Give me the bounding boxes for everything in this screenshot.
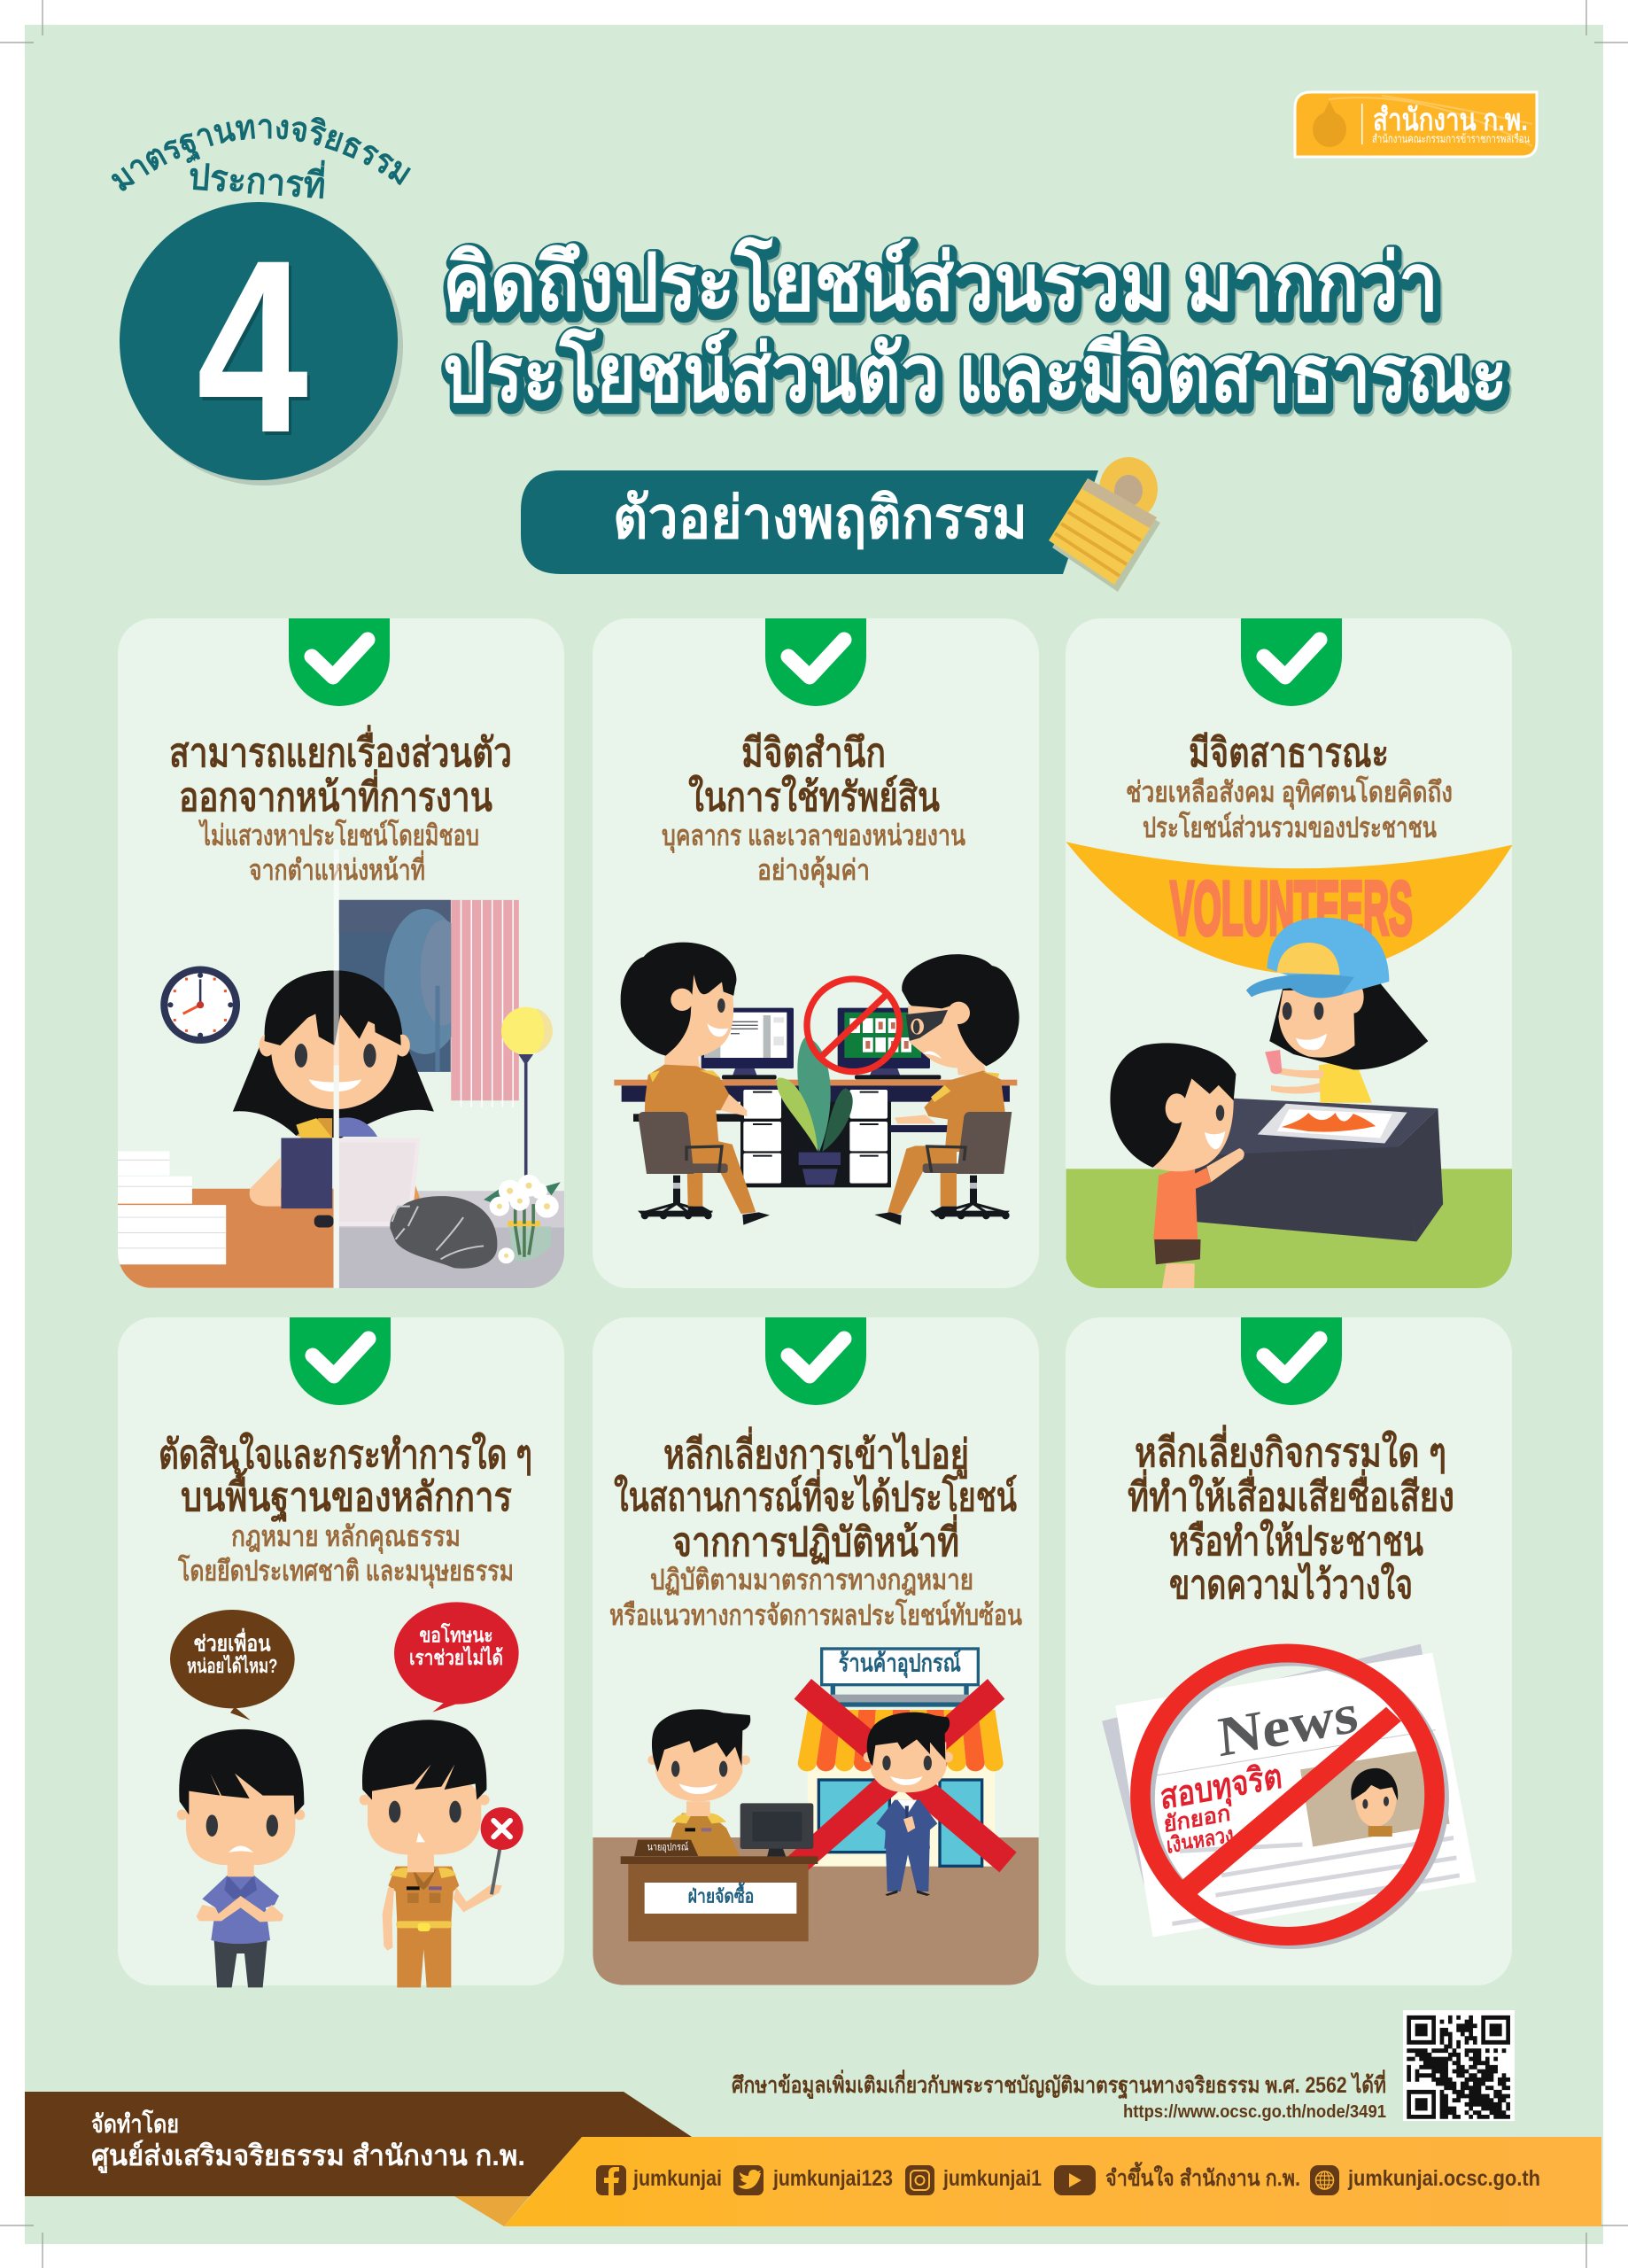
computer monitor [740,1803,813,1857]
QR code [1403,2010,1515,2121]
text block: card 3: ประโยชน์ส่วนรวมของประชาชน [1143,811,1437,843]
panel: card 3 public mind volunteers [1066,618,1514,1290]
text block: card 1: สามารถแยกเรื่องส่วนตัว [169,725,512,775]
banner: behaviour examples: ตัวอย่างพฤติกรรม [613,485,1027,550]
illustration: two officers at desks [614,943,1019,1225]
text block: card 4 [159,1431,532,1589]
icon: twitter [733,2165,764,2195]
footer: orange social media bar [504,2137,1601,2226]
icon: check shield 3 [1241,618,1342,706]
illustration: newspaper with prohibition sign: News [1215,1682,1361,1769]
text block: card 2: บุคลากร และเวลาของหน่วยงาน [662,819,965,854]
icon: youtube [1054,2165,1096,2195]
text block: card 1 [169,725,512,886]
icon: instagram [905,2165,934,2195]
shop building and sign [798,1649,1004,1867]
text block: card 4: โดยยึดประเทศชาติ และมนุษยธรรม [177,1554,514,1589]
illustration: newspaper with prohibition sign: สอบทุจริต [1159,1757,1283,1819]
social links: jumkunjai1 [942,2166,1042,2191]
character: man in blue shirt [177,1729,305,1987]
text block: card 3: มีจิตสาธารณะ [1189,730,1389,775]
text block: more information note: https://www.ocsc.go.th/node/3491 [1123,2102,1386,2122]
illustration: volunteer serving food: VOLUNTEERS [1170,867,1413,951]
character: officer with stop sign [360,1720,523,1987]
icon: check shield 2 [765,618,866,706]
text block: card 6: ที่ทำให้เสื่อมเสียชื่อเสียง [1128,1469,1454,1519]
text block: card 5: ในสถานการณ์ที่จะได้ประโยชน์ [614,1469,1017,1519]
text block: more information note: ศึกษาข้อมูลเพิ่มเติมเกี่ยวกับพระราชบัญญัติมาตรฐานทางจริยธรรม พ.ศ. 2562 ได้ที่ [732,2070,1386,2100]
text block: card 5: หรือแนวทางการจัดการผลประโยชน์ทับซ้อน [609,1598,1022,1631]
panel: card 1 separate personal matters [118,618,565,1290]
text block: card 1: ไม่แสวงหาประโยชน์โดยมิชอบ [198,819,479,851]
main title: คิดถึงประโยชน์ส่วนรวม มากกว่า [443,237,1438,328]
number badge 4 [120,202,403,487]
illustration: volunteer serving food [1066,842,1514,1290]
logo: OCSC office badge: สำนักงานคณะกรรมการข้าราชการพลเรือน [1372,132,1530,145]
illustration: asking favour and officer refusing [170,1602,523,1987]
text block: card 2 [662,730,965,889]
callout: brown speech bubble [170,1610,295,1720]
text block: card 6: ขาดความไว้วางใจ [1169,1561,1413,1607]
number badge 4: 4 [197,208,309,484]
text block: more information note [732,2070,1386,2122]
callout: red speech bubble: เราช่วยไม่ได้ [409,1645,503,1669]
text block: card 3 [1126,730,1453,843]
illustration: newspaper with prohibition sign: ยักยอก [1163,1801,1231,1837]
logo: OCSC office badge: สำนักงาน ก.พ. [1373,103,1528,137]
text block: card 2: มีจิตสำนึก [741,730,886,775]
icon: facebook [596,2165,626,2195]
text block: card 4: ตัดสินใจและกระทำการใด ๆ [159,1431,532,1477]
red cross over shop [788,1679,1017,1872]
text block: card 5: หลีกเลี่ยงการเข้าไปอยู่ [663,1426,969,1480]
social links: jumkunjai.ocsc.go.th [1347,2166,1540,2191]
footer: orange accent fold [454,2196,530,2226]
panel: card 2 use of assets [593,618,1039,1288]
icon: website globe [1310,2165,1339,2195]
text block: card 5: จากการปฏิบัติหน้าที่ [672,1514,959,1565]
name plate: นายอุปกรณ์ [647,1840,689,1852]
main title [443,237,1511,426]
callout: red speech bubble [394,1602,519,1713]
icon: check shield 4 [290,1317,391,1405]
social links [596,2161,1540,2195]
text block: card 4: บนพื้นฐานของหลักการ [181,1467,512,1523]
character: left officer smiling [621,943,770,1225]
footer: brown organiser panel: ศูนย์ส่งเสริมจริยธรรม สำนักงาน ก.พ. [91,2140,525,2174]
text block: card 6 [1128,1425,1454,1607]
text block: card 6: หลีกเลี่ยงกิจกรรมใด ๆ [1135,1425,1446,1475]
shop building and sign: ร้านค้าอุปกรณ์ [839,1650,961,1679]
text block: card 3: ช่วยเหลือสังคม อุทิศตนโดยคิดถึง [1126,775,1453,811]
main title: คิดถึงประโยชน์ส่วนรวม มากกว่า [446,244,1442,335]
illustration: split home and office scene [118,850,565,1290]
logo: OCSC office badge [1295,92,1537,157]
panel: card 5 avoid conflict of interest [593,1317,1039,1985]
illustration: procurement desk and crossed-out shop [593,1649,1039,1985]
social links: jumkunjai123 [772,2166,893,2191]
text block: card 5: ปฏิบัติตามมาตรการทางกฎหมาย [650,1564,973,1596]
footer: brown organiser panel: จัดทำโดย [91,2109,179,2138]
callout: brown speech bubble: หน่อยได้ไหม? [187,1654,277,1677]
panel: card 4 decide on principles [118,1317,564,1987]
text block: card 2: อย่างคุ้มค่า [757,854,870,889]
character: right officer in mask [874,954,1019,1225]
text block: card 5 [609,1426,1022,1631]
icon: check shield 5 [765,1317,866,1405]
number badge 4: 4 [199,212,312,487]
name plate [634,1840,698,1856]
procurement desk: ฝ่ายจัดซื้อ [688,1881,754,1907]
icon: check shield 1 [289,618,390,706]
text block: card 6: หรือทำให้ประชาชน [1169,1518,1423,1564]
social links: jumkunjai [632,2166,722,2191]
callout: brown speech bubble: ช่วยเพื่อน [193,1627,271,1656]
callout: red speech bubble: ขอโทษนะ [419,1622,493,1646]
footer: brown organiser panel [25,2092,692,2196]
text block: card 2: ในการใช้ทรัพย์สิน [688,773,940,819]
main title: คิดถึงประโยชน์ส่วนรวม มากกว่า [445,241,1440,332]
text block: card 1: จากตำแหน่งหน้าที่ [249,850,425,886]
text block: card 4: กฎหมาย หลักคุณธรรม [231,1520,461,1555]
illustration: newspaper with prohibition sign: เงินหลวง [1166,1822,1235,1859]
heading: curved standard label: มาตรฐานทางจริยธรรม [112,117,411,191]
banner: behaviour examples [521,470,1098,574]
text block: card 1: ออกจากหน้าที่การงาน [179,769,492,819]
panel: card 6 avoid damaging reputation [1066,1317,1512,1985]
illustration: newspaper with prohibition sign [1102,1644,1476,1949]
character: businessman [864,1713,953,1896]
social links: จำขึ้นใจ สำนักงาน ก.พ. [1105,2161,1300,2191]
character: procurement officer [647,1709,750,1856]
procurement desk [621,1856,818,1941]
icon: epaulette [1049,457,1160,592]
heading: curved standard label: ประการที่ [187,151,328,206]
icon: check shield 6 [1241,1317,1342,1405]
